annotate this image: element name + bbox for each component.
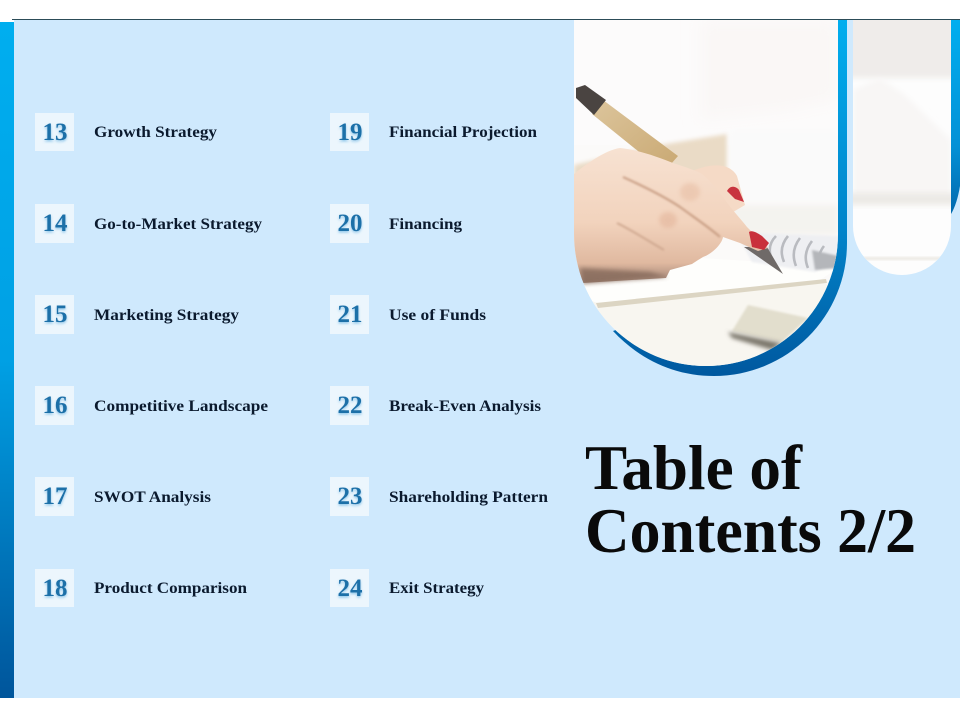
item 18: Product Comparison xyxy=(94,580,247,597)
title xyxy=(585,432,916,566)
item 23: 23 xyxy=(338,483,362,510)
item 18: 18 xyxy=(42,575,68,602)
item 17: 17 xyxy=(42,483,68,510)
item 17 xyxy=(35,477,211,516)
title: Contents 2/2 xyxy=(585,495,916,566)
item 19: Financial Projection xyxy=(389,124,537,141)
item 14 xyxy=(35,204,262,243)
second photo panel, blurred continuation xyxy=(853,20,951,275)
item 21 xyxy=(330,295,486,334)
item 15 xyxy=(35,295,239,334)
item 20: 20 xyxy=(338,210,362,237)
item 15: 15 xyxy=(42,301,68,328)
item 24: Exit Strategy xyxy=(389,580,484,597)
item 22 xyxy=(330,386,541,425)
item 17: SWOT Analysis xyxy=(94,489,211,506)
title: Table of xyxy=(585,432,803,503)
item 22: 22 xyxy=(338,392,362,419)
item 24: 24 xyxy=(338,575,363,602)
item 19 xyxy=(330,113,537,151)
item 14: Go-to-Market Strategy xyxy=(94,216,262,233)
pen xyxy=(576,85,783,274)
main photo: hand writing in notebook xyxy=(574,20,838,374)
item 13 xyxy=(35,113,217,151)
item 20: Financing xyxy=(389,216,462,233)
top border line xyxy=(12,19,960,20)
item 16: 16 xyxy=(42,392,68,419)
left gradient bar xyxy=(0,22,14,698)
back finger with red nail xyxy=(694,166,745,212)
item 24 xyxy=(330,569,484,607)
hand xyxy=(574,148,768,283)
item 22: Break-Even Analysis xyxy=(389,398,541,415)
right column of contents xyxy=(330,113,548,607)
item 18 xyxy=(35,569,247,607)
item 23 xyxy=(330,477,548,516)
left column of contents xyxy=(35,113,268,607)
item 13: 13 xyxy=(42,119,68,146)
item 14: 14 xyxy=(42,210,68,237)
item 21: 21 xyxy=(338,301,362,328)
item 23: Shareholding Pattern xyxy=(389,489,548,506)
red fingernail xyxy=(749,231,769,250)
item 16: Competitive Landscape xyxy=(94,398,268,415)
notebook xyxy=(580,232,838,308)
item 13: Growth Strategy xyxy=(94,124,217,141)
item 21: Use of Funds xyxy=(389,307,486,324)
item 19: 19 xyxy=(338,119,362,146)
item 15: Marketing Strategy xyxy=(94,307,239,324)
blue accent strip at right edge xyxy=(951,20,960,214)
blurred object on desk xyxy=(732,305,808,342)
item 20 xyxy=(330,204,462,243)
blue U accent behind main photo xyxy=(613,20,847,376)
item 16 xyxy=(35,386,268,425)
